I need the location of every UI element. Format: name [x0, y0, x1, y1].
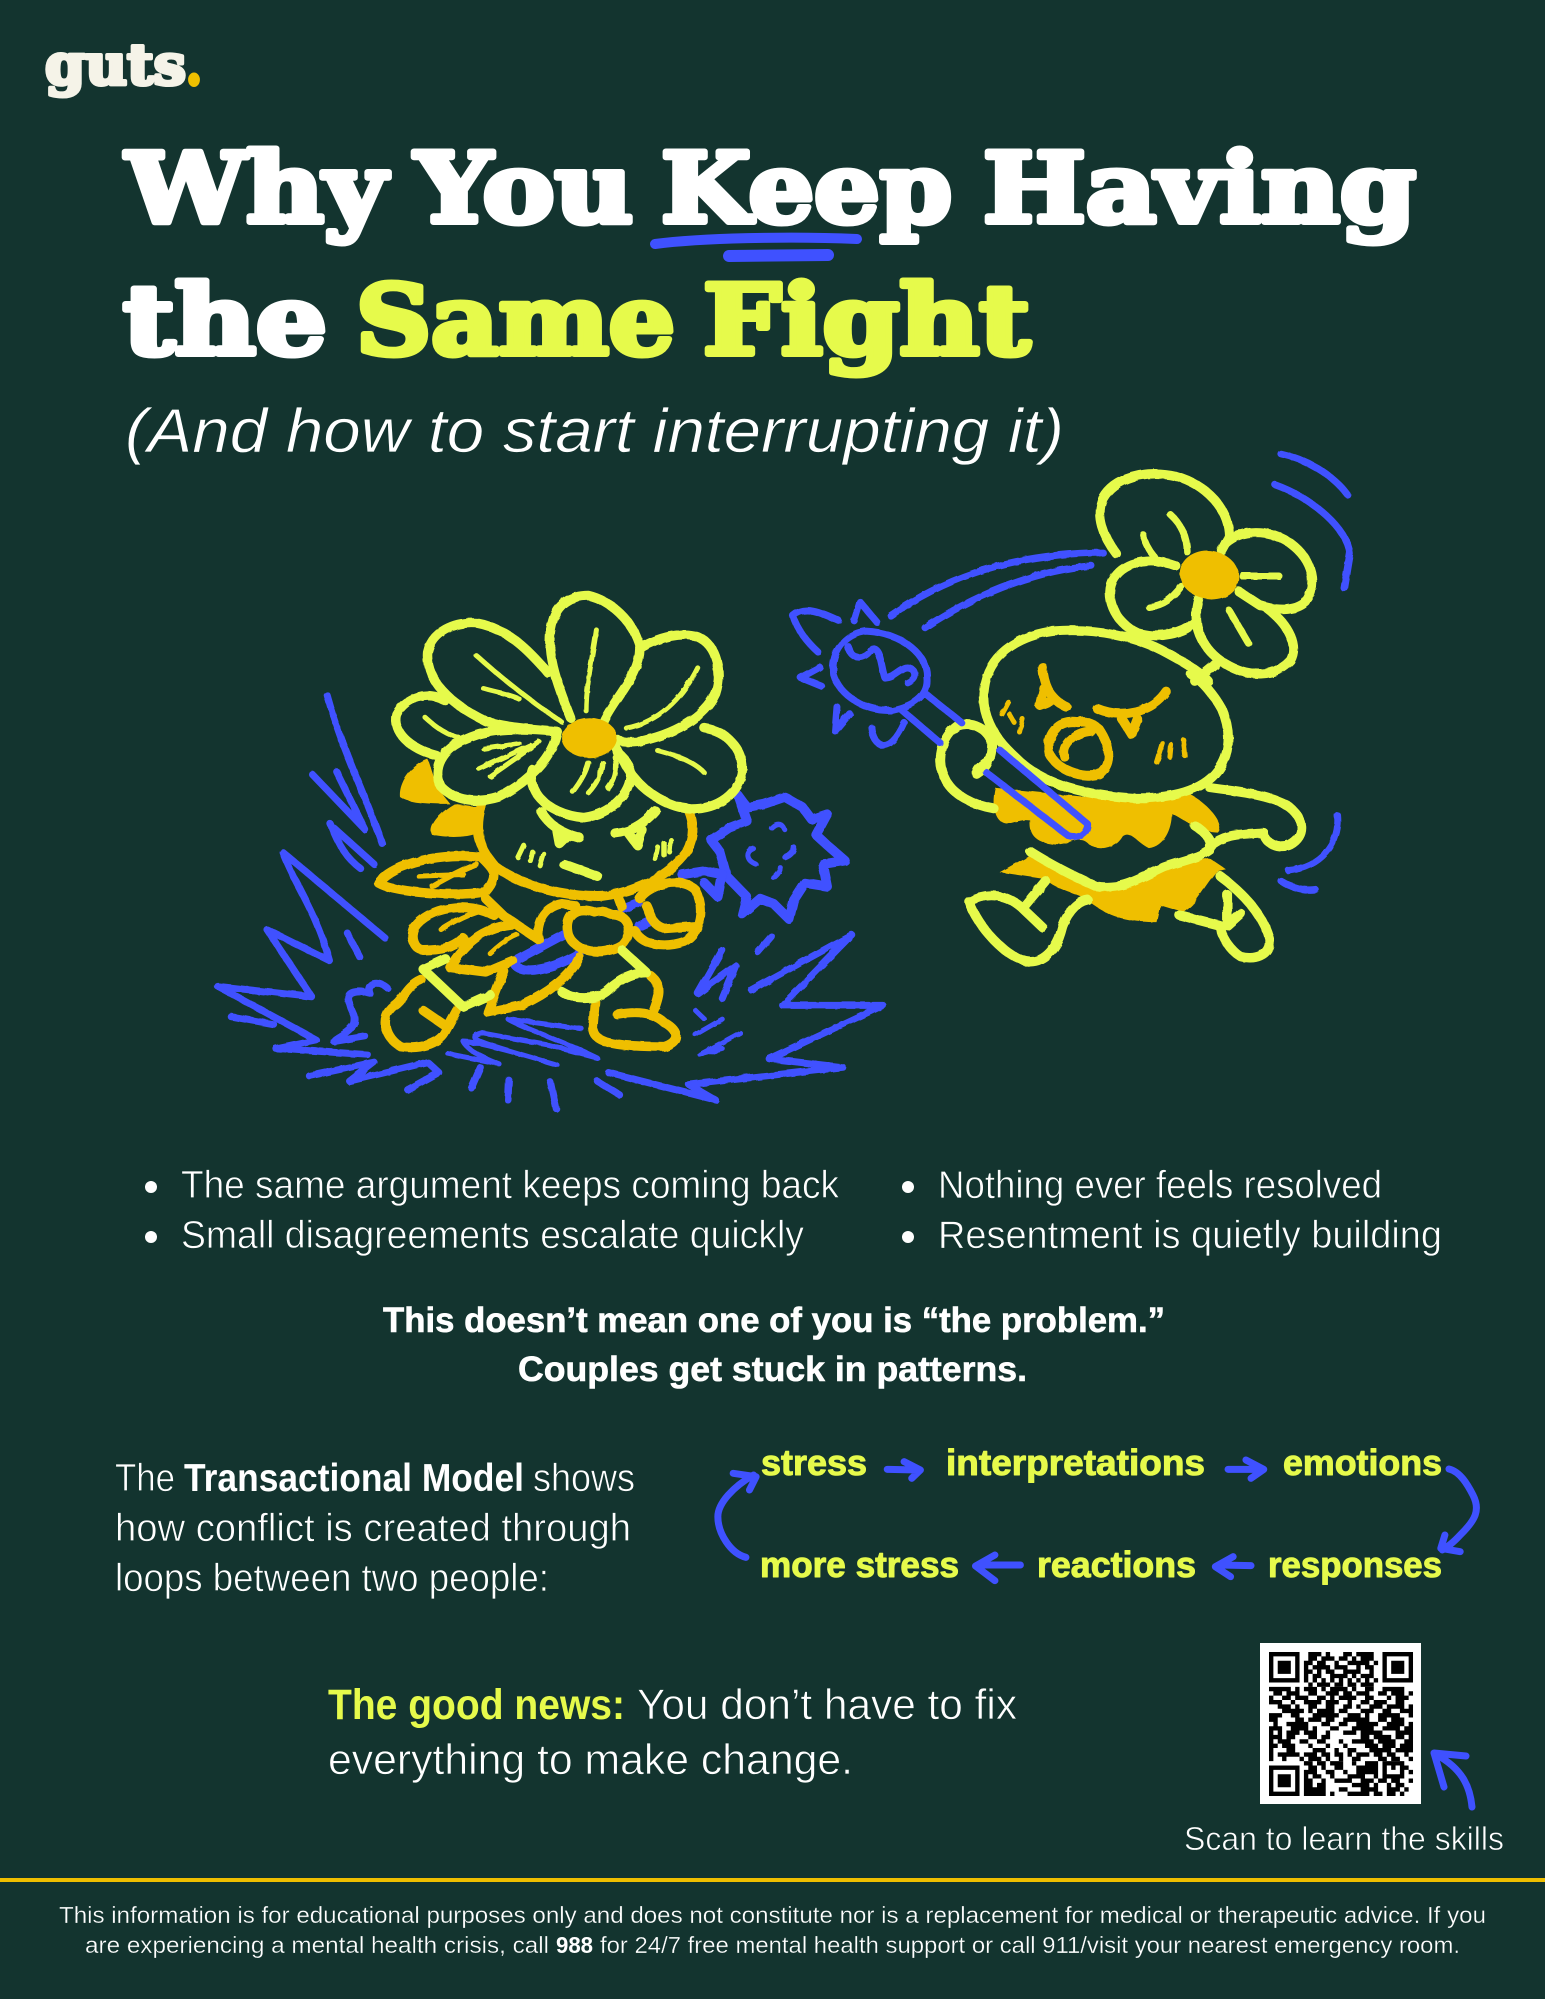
- model description: [115, 1457, 635, 1600]
- swinging mace: [793, 602, 1088, 837]
- bullet list: left column: Small disagreements escalate quickly: [181, 1214, 804, 1257]
- bullet list: left column: The same argument keeps coming back: [181, 1164, 839, 1207]
- illustration: flower fighter, attacking, right: [793, 454, 1350, 962]
- title: Keep: [661, 132, 952, 245]
- good news statement: The good news:: [328, 1681, 625, 1729]
- logo: guts.: .: [186, 32, 202, 98]
- model description: shows: [533, 1457, 635, 1500]
- conflict loop labels: reactions: [1037, 1544, 1196, 1585]
- hair: [400, 759, 481, 837]
- lower skirt: [1000, 855, 1225, 922]
- title: [123, 132, 1416, 377]
- title: Fight: [703, 264, 1030, 377]
- conflict loop labels: stress: [761, 1442, 867, 1483]
- motion lines: [891, 454, 1350, 890]
- body, limbs and small flower: [941, 474, 1312, 962]
- footer disclaimer: This information is for educational purposes only and does not constitute nor is a replacement for medical or therapeutic advice. If you: [59, 1902, 1486, 1928]
- arrow pointing to QR code: [1434, 1753, 1472, 1807]
- subtitle: (And how to start interrupting it): [125, 397, 1064, 466]
- model description: Transactional Model: [184, 1457, 524, 1500]
- ground scribble: [448, 1010, 740, 1065]
- title: Having: [983, 132, 1416, 245]
- good news statement: everything to make change.: [328, 1736, 853, 1784]
- cheek marks: [518, 840, 671, 866]
- good news statement: You don’t have to fix: [637, 1681, 1017, 1729]
- QR code: [1260, 1643, 1421, 1804]
- key message: Couples get stuck in patterns.: [518, 1350, 1027, 1389]
- title: You: [414, 132, 633, 245]
- bullet list: right column: Resentment is quietly building: [938, 1214, 1442, 1257]
- conflict loop arrows: [718, 1460, 1476, 1581]
- title: Why: [125, 132, 390, 245]
- cheek marks: [1002, 702, 1185, 762]
- large flower head: [396, 595, 742, 818]
- key message: [383, 1301, 1165, 1389]
- bullet list: right column: [902, 1164, 1442, 1257]
- small flower veins: [1143, 514, 1279, 643]
- bullet list: right column: Nothing ever feels resolved: [938, 1164, 1382, 1207]
- conflict loop labels: more stress: [760, 1544, 959, 1585]
- conflict loop labels: [760, 1442, 1442, 1585]
- footer disclaimer: [59, 1902, 1486, 1958]
- model description: loops between two people:: [115, 1557, 549, 1600]
- model description: The: [115, 1457, 175, 1500]
- key message: This doesn’t mean one of you is “the problem.”: [383, 1301, 1165, 1340]
- wing veins: [419, 864, 517, 954]
- impact burst and motion lines: [218, 695, 883, 1109]
- footer divider: [0, 1878, 1545, 1882]
- QR caption: Scan to learn the skills: [1184, 1820, 1504, 1857]
- footer disclaimer: are experiencing a mental health crisis, call: [85, 1932, 549, 1958]
- title: Same: [356, 264, 675, 377]
- bullet list: left column: [145, 1164, 839, 1257]
- yellow legs and face: [423, 811, 655, 1007]
- upper skirt: [994, 788, 1220, 848]
- flower centre: [562, 718, 617, 758]
- illustration: flower fighter, defending, left: [218, 595, 883, 1109]
- conflict loop labels: responses: [1268, 1544, 1442, 1585]
- footer disclaimer: for 24/7 free mental health support or call 911/visit your nearest emergency room.: [600, 1932, 1460, 1958]
- spiked mace: [515, 795, 845, 970]
- angry face: [1040, 667, 1166, 776]
- title: the: [123, 264, 327, 377]
- logo: guts.: guts: [45, 32, 186, 98]
- good news statement: [328, 1681, 1017, 1784]
- small flower centre: [1172, 543, 1247, 607]
- conflict loop labels: interpretations: [946, 1442, 1205, 1483]
- footer disclaimer: 988: [556, 1932, 593, 1958]
- model description: how conflict is created through: [115, 1507, 631, 1550]
- petal veins: [425, 630, 704, 793]
- mace face marks: [748, 824, 794, 878]
- underline under Keep: [655, 238, 857, 256]
- orange body: [379, 804, 701, 1047]
- conflict loop labels: emotions: [1283, 1442, 1442, 1483]
